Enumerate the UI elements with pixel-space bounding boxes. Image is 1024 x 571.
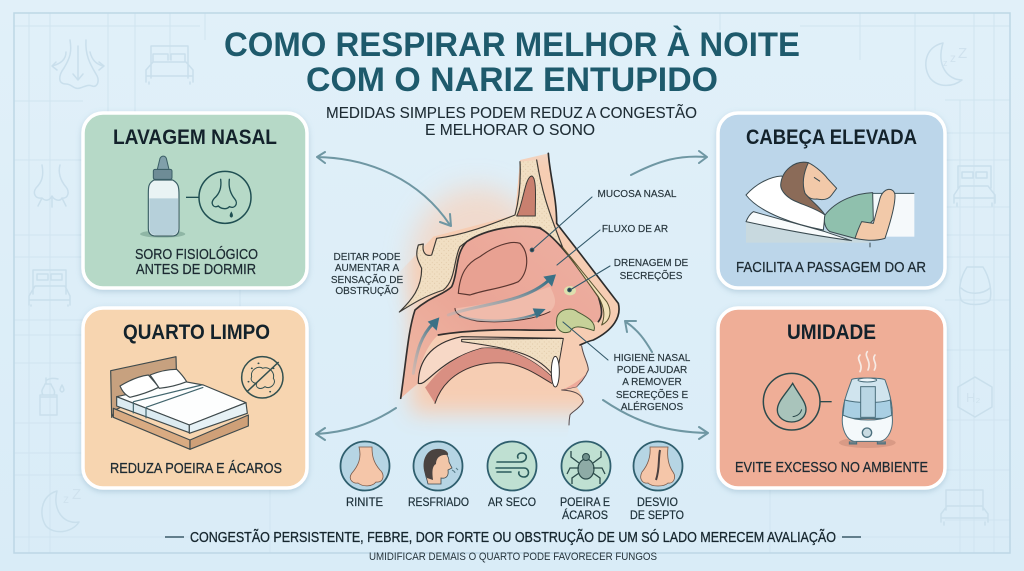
icon: background moon and zzz top right <box>926 43 967 85</box>
front tooth <box>551 356 559 387</box>
icon: person on elevated pillow <box>746 162 914 247</box>
title: COM O NARIZ ENTUPIDO <box>306 61 718 99</box>
label: deitar pode: SENSAÇÃO DE <box>331 273 403 286</box>
airflow arrowhead upper <box>543 274 556 287</box>
label: resfriado: RESFRIADO <box>408 497 469 509</box>
airflow arrow lower <box>413 323 433 373</box>
palate tube <box>418 337 562 384</box>
icon: background moon and zzz top right: Z <box>958 45 967 62</box>
label: drenagem de secreções: SECREÇÕES <box>620 269 683 282</box>
icon: rinite <box>340 442 390 490</box>
skin <box>399 154 618 426</box>
icon: background moon and zzz bottom left: z <box>63 492 69 506</box>
airflow arrow middle <box>460 313 538 321</box>
arrow: lavagem to nose <box>317 152 451 226</box>
icon: bed <box>111 357 248 449</box>
icon: ar seco <box>488 442 536 490</box>
label: deitar pode: DEITAR PODE <box>333 252 401 263</box>
icon: poeira e ácaros <box>562 442 610 490</box>
heading: quarto limpo: QUARTO LIMPO <box>123 321 270 344</box>
panel: lavagem nasal <box>83 113 307 288</box>
icon: background bed top left <box>146 46 193 84</box>
label: drenagem de secreções: DRENAGEM DE <box>614 258 689 269</box>
icon: resfriado <box>414 442 462 490</box>
icon: background bed right <box>954 166 995 206</box>
middle turbinate <box>455 287 555 322</box>
label: higiene nasal: SECREÇÕES E <box>616 388 688 401</box>
panel: quarto limpo <box>83 308 307 488</box>
icon: background humidifier right <box>960 267 991 304</box>
arrow: nose to cabeça elevada <box>631 151 707 175</box>
label: higiene nasal: A REMOVER <box>622 377 682 388</box>
label: drenagem de secreções <box>614 258 689 282</box>
title <box>224 26 800 99</box>
caption: facilita: FACILITA A PASSAGEM DO AR <box>736 260 926 276</box>
airflow arrowhead lower <box>428 317 439 331</box>
icon: background moon and zzz bottom left: Z <box>72 486 81 503</box>
chart: nose cross-section <box>396 152 620 426</box>
upper turbinate <box>458 242 527 295</box>
label: mucosa nasal: MUCOSA NASAL <box>598 189 677 200</box>
nasal vestibule <box>556 309 594 333</box>
label: deitar pode: AUMENTAR A <box>335 263 399 274</box>
heading: umidade: UMIDADE <box>787 321 876 344</box>
icon: background moon and zzz top right: z <box>950 51 956 65</box>
label: poeira e ácaros: ÁCAROS <box>562 509 608 522</box>
caption: soro fisiológico <box>135 246 258 278</box>
icon: background hexagon H2 right <box>958 377 992 417</box>
icon: desvio de septo <box>634 442 682 490</box>
mucosa band under palate <box>425 348 552 403</box>
arrow: to nose tip <box>625 321 652 352</box>
caption: soro fisiológico: ANTES DE DORMIR <box>136 262 256 278</box>
label: desvio de septo <box>630 497 684 522</box>
label: ar seco: AR SECO <box>488 497 536 509</box>
label: deitar pode <box>331 252 403 297</box>
label: higiene nasal: HIGIENE NASAL <box>614 353 691 364</box>
caption: evite excesso: EVITE EXCESSO NO AMBIENTE <box>735 460 928 476</box>
caption: soro fisiológico: SORO FISIOLÓGICO <box>135 246 258 263</box>
label: desvio de septo: DE SEPTO <box>630 510 684 522</box>
nasal wall cartilage <box>563 247 610 325</box>
frontal sinus <box>517 176 536 216</box>
icon: no dust <box>242 357 283 398</box>
caption: reduza poeira: REDUZA POEIRA E ÁCAROS <box>110 460 282 477</box>
bone: frontal and ethmoid <box>399 160 563 312</box>
arrow: nose to quarto limpo <box>316 408 396 440</box>
label: poeira e ácaros: POEIRA E <box>560 497 610 509</box>
heading: lavagem nasal: LAVAGEM NASAL <box>113 126 277 149</box>
label: desvio de septo: DESVIO <box>637 497 678 509</box>
icon: water drop <box>763 373 832 430</box>
label: higiene nasal: PODE AJUDAR <box>617 365 687 376</box>
nasal cavity <box>401 226 602 398</box>
icon: background hexagon H2 right: H₂ <box>966 390 980 405</box>
panel: umidade <box>718 308 945 488</box>
airflow arrowhead middle <box>533 308 546 318</box>
icon: background bed left <box>29 270 70 306</box>
subtitle: MEDIDAS SIMPLES PODEM REDUZ A CONGESTÃO <box>326 105 697 122</box>
subtitle <box>326 105 697 139</box>
subtitle: E MELHORAR O SONO <box>425 122 595 139</box>
lips <box>562 346 588 425</box>
heading: cabeça elevada: CABEÇA ELEVADA <box>746 126 917 149</box>
leader lines <box>530 197 610 360</box>
label: poeira e ácaros <box>560 497 610 522</box>
arrow: nose to umidade <box>603 400 708 439</box>
icon: humidifier <box>839 352 896 448</box>
label: higiene nasal <box>614 353 691 413</box>
hard palate <box>462 338 563 373</box>
label: deitar pode: OBSTRUÇÃO <box>335 284 399 297</box>
icon: background nose left <box>34 165 68 207</box>
icon: background bed bottom right <box>941 490 988 525</box>
icon: background moon and zzz top right: z <box>943 58 948 68</box>
secretion spot <box>564 286 576 295</box>
label: fluxo de ar: FLUXO DE AR <box>602 224 668 235</box>
footnote: UMIDIFICAR DEMAIS O QUARTO PODE FAVORECER FUNGOS <box>369 551 657 563</box>
icon: background dropper bottle left <box>40 378 64 415</box>
label: higiene nasal: ALÉRGENOS <box>621 400 683 413</box>
airflow arrow upper <box>448 281 548 315</box>
icon: saline bottle and nose <box>140 156 251 238</box>
label: rinite: RINITE <box>346 497 383 509</box>
icon: background nose with arrows <box>52 40 104 88</box>
face outline <box>548 153 619 345</box>
warning text: CONGESTÃO PERSISTENTE, FEBRE, DOR FORTE OU OBSTRUÇÃO DE UM SÓ LADO MERECEM AVALIAÇÃO <box>190 529 836 546</box>
panel: cabeça elevada <box>718 113 945 288</box>
icon: background moon and zzz bottom left <box>42 486 81 532</box>
title: COMO RESPIRAR MELHOR À NOITE <box>224 26 800 64</box>
